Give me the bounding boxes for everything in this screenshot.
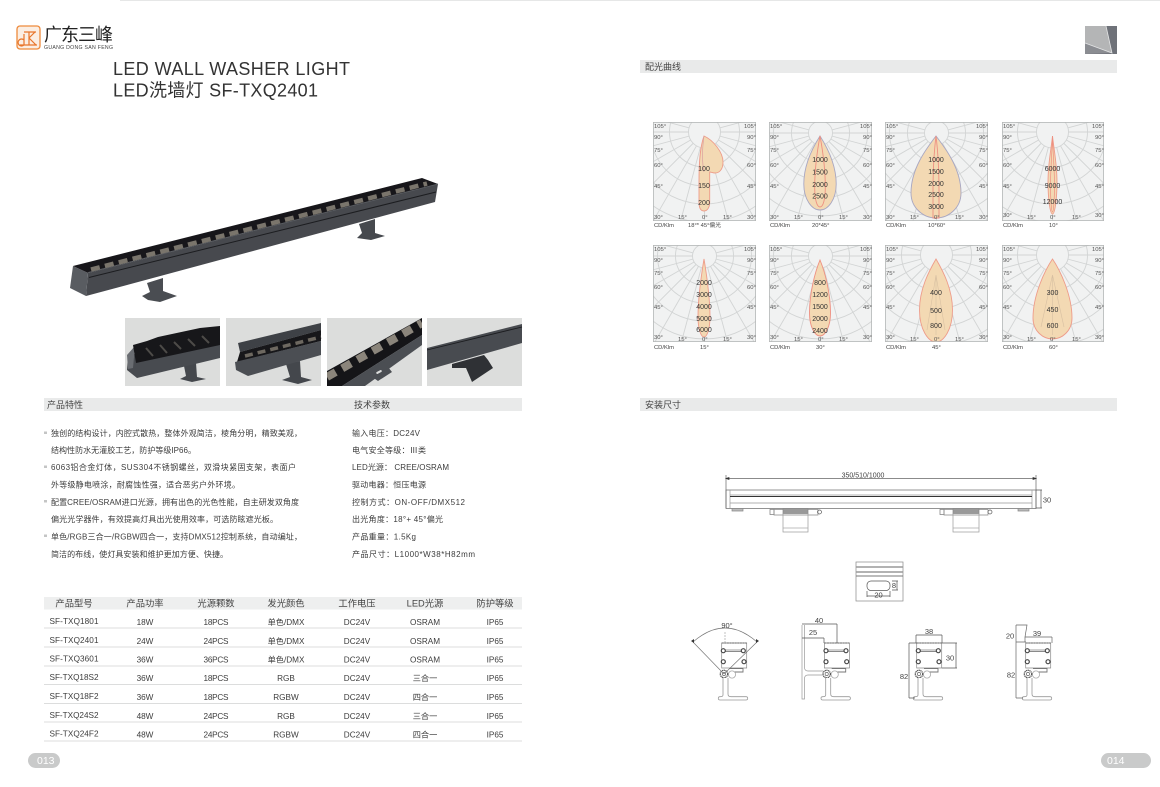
table rows: RGBW <box>273 693 299 702</box>
polar chart 15°: 60° <box>654 285 663 291</box>
polar chart 15°: 45° <box>747 305 756 311</box>
polar chart 18°*45°: 75° <box>747 148 756 154</box>
polar chart 10*60°: 45° <box>979 184 988 190</box>
polar chart 30°: 15° <box>794 337 803 343</box>
polar chart 60°: 45° <box>1095 305 1104 311</box>
table header: 工作电压 <box>338 598 376 608</box>
polar chart 60°: 15° <box>1072 337 1081 343</box>
polar chart 30°: 45° <box>770 305 779 311</box>
polar chart 45°: 45° <box>932 345 941 351</box>
side view: wall offset: 40 <box>815 616 823 625</box>
corner icon <box>1085 26 1117 54</box>
polar chart 20*45°: 0° <box>818 215 824 221</box>
logo: 广东三峰 <box>44 25 113 45</box>
polar chart 10°: 60° <box>1003 163 1012 169</box>
polar chart 10°: 15° <box>1027 215 1036 221</box>
polar chart 60°: 105° <box>1092 247 1104 253</box>
table header: 产品型号 <box>55 598 93 608</box>
side view: width and height: 38 <box>925 627 933 636</box>
polar chart 45°: 90° <box>979 258 988 264</box>
polar chart 10*60°: 2000 <box>928 181 944 188</box>
side view: top clearance <box>1006 625 1052 700</box>
technical parameters list: 产品尺寸：L1000*W38*H82mm <box>352 549 475 559</box>
polar chart 45°: 45° <box>979 305 988 311</box>
polar chart 15°: 90° <box>747 258 756 264</box>
table rows: SF-TXQ24F2 <box>50 730 99 738</box>
section header: light distribution curves <box>640 60 1117 73</box>
polar chart 30° <box>690 173 950 386</box>
side view: top clearance: 39 <box>1033 629 1041 638</box>
polar chart 45°: 105° <box>976 247 988 253</box>
polar chart 10*60°: 75° <box>886 148 895 154</box>
polar chart 10°: 90° <box>1003 135 1012 141</box>
polar chart 20*45°: 90° <box>863 135 872 141</box>
polar chart 18°*45°: 100 <box>698 166 710 173</box>
polar chart 20*45°: 1500 <box>812 170 828 176</box>
thumbnail: end detail with fins <box>125 318 220 386</box>
polar chart 10*60°: 15° <box>955 215 964 221</box>
polar chart 18°*45° <box>574 42 834 262</box>
side view: width and height <box>900 627 957 700</box>
polar chart 18°*45°: 75° <box>654 148 663 154</box>
front view drawing <box>726 475 1042 532</box>
title: LED WALL WASHER LIGHT <box>113 59 350 79</box>
polar chart 10*60°: 45° <box>886 184 895 190</box>
table rows: 单色/DMX <box>268 636 305 646</box>
table rows: 48W <box>137 730 154 740</box>
polar chart 60°: 300 <box>1047 290 1058 297</box>
polar chart 15°: 5000 <box>696 316 712 323</box>
section header: product features <box>44 398 522 411</box>
polar chart 10*60°: 30° <box>886 215 895 221</box>
table rows: DC24V <box>344 674 371 683</box>
polar chart 15°: 6000 <box>696 327 712 334</box>
side view: top clearance: 20 <box>1006 632 1014 640</box>
table rows: OSRAM <box>410 637 440 646</box>
polar chart 60°: 60° <box>1095 285 1104 291</box>
polar chart 45°: 500 <box>930 308 942 315</box>
polar chart 45°: 90° <box>886 258 895 264</box>
polar chart 18°*45°: 18°* 45°偏光 <box>688 221 721 229</box>
table rows: 36W <box>137 656 154 664</box>
table rows: DC24V <box>344 712 371 721</box>
polar chart 10*60°: 1500 <box>928 169 944 176</box>
polar chart 10*60°: 30° <box>979 215 988 221</box>
page number 013: 013 <box>37 755 55 767</box>
table rows: IP65 <box>487 656 504 664</box>
side view: wall offset: 25 <box>809 628 817 637</box>
polar chart 10*60° <box>806 50 1066 263</box>
polar chart 45°: 800 <box>930 323 942 330</box>
thumbnail: mounting bracket <box>427 318 522 386</box>
table rows: SF-TXQ18S2 <box>50 673 99 682</box>
polar chart 15°: 105° <box>654 247 666 253</box>
right mounting bracket <box>940 508 992 532</box>
polar chart 45°: 75° <box>979 271 988 277</box>
polar chart 20*45°: 20*45° <box>812 223 829 229</box>
table header <box>55 598 514 608</box>
table rows: OSRAM <box>410 618 440 627</box>
table rows: SF-TXQ3601 <box>50 654 99 664</box>
polar chart 10*60°: 0° <box>934 215 940 221</box>
product features list: 偏光光学器件，有效提高灯具出光使用效率，可选防眩遮光板。 <box>51 514 278 524</box>
front view dimension labels: 30 <box>1043 496 1051 504</box>
table header: LED光源 <box>407 598 443 608</box>
polar chart 30°: 1200 <box>812 292 828 299</box>
table rows: 36PCS <box>204 656 229 664</box>
polar chart 10°: 105° <box>1003 124 1015 130</box>
product features list: 6063铝合金灯体，SUS304不锈钢螺丝，双滑块紧固支架，表面户 <box>51 462 296 472</box>
polar chart 18°*45°: 60° <box>747 163 756 169</box>
polar chart 30°: CD/Klm <box>770 345 790 351</box>
polar chart 60°: 0° <box>1050 337 1056 343</box>
polar chart 10°: 0° <box>1050 215 1056 221</box>
polar chart 18°*45°: 15° <box>723 215 732 221</box>
section header: product features: 产品特性 <box>47 399 83 410</box>
table rows: 18PCS <box>204 674 229 683</box>
section header: product features: 技术参数 <box>354 399 390 410</box>
polar chart 60°: CD/Klm <box>1003 345 1023 351</box>
polar chart 18°*45°: 15° <box>678 215 687 221</box>
product features list <box>44 428 302 559</box>
polar chart 20*45°: 60° <box>770 163 779 169</box>
logo <box>17 25 113 51</box>
polar chart 45°: 15° <box>910 337 919 343</box>
title <box>113 59 350 100</box>
table rows: IP65 <box>487 712 504 721</box>
product features list: 简洁的布线，使灯具安装和维护更加方便、快捷。 <box>51 549 228 559</box>
polar chart 20*45°: 105° <box>860 124 872 130</box>
polar chart 10°: 9000 <box>1045 183 1060 190</box>
polar chart 60°: 105° <box>1003 247 1015 253</box>
polar chart 45°: 30° <box>886 335 895 341</box>
polar chart 18°*45°: 90° <box>747 135 756 141</box>
polar chart 15°: 3000 <box>696 292 712 299</box>
slot plate drawing: 8 <box>892 581 896 590</box>
table rows: DC24V <box>344 618 371 627</box>
front view dimension labels <box>842 472 1051 504</box>
polar chart 18°*45°: 60° <box>654 163 663 169</box>
polar chart 10*60°: 1000 <box>928 157 944 164</box>
polar chart 30°: 2000 <box>812 316 828 323</box>
table rows: IP65 <box>487 637 504 646</box>
polar chart 30°: 45° <box>863 305 872 311</box>
technical parameters list: 控制方式：ON-OFF/DMX512 <box>352 497 466 507</box>
polar chart 18°*45°: 45° <box>747 184 756 190</box>
table rows: 四合一 <box>413 692 437 702</box>
slot plate drawing: 20 <box>874 590 883 600</box>
polar chart 10*60°: 2500 <box>928 192 944 199</box>
polar chart 15°: 60° <box>747 285 756 291</box>
technical parameters list: 产品重量：1.5Kg <box>352 532 416 542</box>
polar chart 18°*45°: 200 <box>698 200 710 207</box>
polar chart 15°: 15° <box>723 337 732 343</box>
polar chart 10°: 30° <box>1095 213 1104 219</box>
polar chart 10°: 60° <box>1095 163 1104 169</box>
product features list: 外等级静电喷涂，耐腐蚀性强，适合恶劣户外环境。 <box>51 480 240 490</box>
polar chart 30°: 90° <box>770 258 779 264</box>
polar chart 15°: 105° <box>744 247 756 253</box>
table rows: 24PCS <box>204 712 229 721</box>
polar chart 30°: 2400 <box>812 328 828 335</box>
polar chart 10°: 90° <box>1095 135 1104 141</box>
logo: GUANG DONG SAN FENG <box>44 45 113 51</box>
polar chart 10*60°: 3000 <box>928 204 944 211</box>
polar chart 30°: 90° <box>863 258 872 264</box>
polar chart 20*45°: 105° <box>770 124 782 130</box>
polar chart 15°: 30° <box>747 335 756 341</box>
polar chart 20*45°: 30° <box>770 215 779 221</box>
table rows: 18PCS <box>204 618 229 627</box>
polar chart 45°: 0° <box>934 337 940 343</box>
polar chart 20*45°: 45° <box>863 184 872 190</box>
table rows: IP65 <box>487 618 504 627</box>
table rows: 24W <box>137 637 154 646</box>
polar chart 60° <box>922 165 1160 385</box>
polar chart 45°: 45° <box>886 305 895 311</box>
product photo: wall washer bar <box>70 178 438 302</box>
polar chart 20*45° <box>690 50 950 263</box>
polar chart 30°: 75° <box>770 271 779 277</box>
side view: top clearance: 82 <box>1007 670 1015 680</box>
polar chart 30°: 105° <box>860 247 872 253</box>
polar chart 60°: 30° <box>1003 335 1012 341</box>
polar chart 10*60°: 90° <box>979 135 988 141</box>
polar chart 45°: 60° <box>979 285 988 291</box>
table rows <box>50 617 504 740</box>
polar chart 15°: 45° <box>654 305 663 311</box>
table rows: 三合一 <box>413 673 437 683</box>
polar chart 30°: 15° <box>839 337 848 343</box>
technical parameters list: LED光源： CREE/OSRAM <box>352 462 449 472</box>
side view: width and height: 30 <box>946 654 954 662</box>
polar chart 30°: 105° <box>770 247 782 253</box>
table rows: IP65 <box>487 730 504 740</box>
polar chart 60°: 60° <box>1049 345 1058 351</box>
polar chart 10*60°: 60° <box>886 163 895 169</box>
polar chart 18°*45°: 30° <box>747 215 756 221</box>
polar chart 20*45°: 75° <box>770 148 779 154</box>
table rows: SF-TXQ24S2 <box>50 711 99 720</box>
polar chart 45°: 60° <box>886 285 895 291</box>
table header: 光源颗数 <box>197 598 235 608</box>
table rows: 18W <box>137 618 154 627</box>
polar chart 10°: 6000 <box>1045 166 1060 173</box>
polar chart 10°: 45° <box>1003 184 1012 190</box>
table rows: 36W <box>137 674 154 683</box>
product features list: 配置CREE/OSRAM进口光源，拥有出色的光色性能，自主研发双角度 <box>51 497 299 507</box>
polar chart 15°: 0° <box>702 337 708 343</box>
polar chart 30°: 1500 <box>812 304 828 311</box>
table rows: 四合一 <box>413 730 437 740</box>
polar chart 10°: 10° <box>1049 223 1058 229</box>
polar chart 10°: 75° <box>1095 148 1104 154</box>
product features list: 单色/RGB三合一/RGBW四合一，支持DMX512控制系统，自动编址， <box>51 532 302 542</box>
polar chart 30°: 60° <box>770 285 779 291</box>
polar chart 10*60°: 15° <box>910 215 919 221</box>
table rows: OSRAM <box>410 656 440 664</box>
polar chart 20*45°: 15° <box>839 215 848 221</box>
polar chart 20*45°: CD/Klm <box>770 223 790 229</box>
polar chart 20*45°: 1000 <box>812 157 828 164</box>
polar chart 20*45°: 2000 <box>812 182 828 189</box>
polar chart 20*45°: 45° <box>770 184 779 190</box>
side view: width and height: 82 <box>900 672 908 681</box>
polar chart 45°: 75° <box>886 271 895 277</box>
table rows: 24PCS <box>204 637 229 646</box>
polar chart 10°: 12000 <box>1043 199 1062 206</box>
polar chart 20*45°: 60° <box>863 163 872 169</box>
polar chart 18°*45°: CD/Klm <box>654 223 674 229</box>
polar chart 30°: 30° <box>863 335 872 341</box>
polar chart 10*60°: CD/Klm <box>886 223 906 229</box>
polar chart 20*45°: 15° <box>794 215 803 221</box>
polar chart 15°: 4000 <box>696 304 712 311</box>
table rows: IP65 <box>487 674 504 683</box>
thumbnail: front end view <box>226 318 321 386</box>
polar chart 15° <box>574 173 834 386</box>
table header: 产品功率 <box>126 598 164 608</box>
polar chart 10*60°: 105° <box>886 124 898 130</box>
title: LED洗墙灯 SF-TXQ2401 <box>113 80 318 100</box>
polar chart 15°: 90° <box>654 258 663 264</box>
technical parameters list <box>352 428 475 559</box>
polar chart 10*60°: 75° <box>979 148 988 154</box>
polar chart 60°: 450 <box>1047 307 1058 314</box>
polar chart 15°: 15° <box>700 345 709 351</box>
polar chart 10° <box>922 42 1160 262</box>
section header: light distribution curves: 配光曲线 <box>645 61 681 72</box>
page number 014 <box>1101 753 1151 768</box>
polar chart 10°: 30° <box>1003 213 1012 219</box>
polar chart 10°: CD/Klm <box>1003 223 1023 229</box>
table rows: 48W <box>137 712 154 721</box>
polar chart 60°: 30° <box>1095 335 1104 341</box>
table rows: DC24V <box>344 637 371 646</box>
polar chart 15°: 2000 <box>696 280 712 287</box>
technical parameters list: 驱动电器：恒压电源 <box>352 480 426 490</box>
table rows: 单色/DMX <box>268 617 305 627</box>
thumbnail: LED close-up <box>327 318 422 386</box>
table rows: IP65 <box>487 693 504 702</box>
polar chart 20*45°: 2500 <box>812 194 828 200</box>
table rows: RGBW <box>273 730 299 740</box>
polar chart 60°: 90° <box>1095 258 1104 264</box>
product features list: 独创的结构设计，内腔式散热，整体外观简洁，棱角分明，精致美观， <box>51 428 302 438</box>
technical parameters list: 输入电压：DC24V <box>352 428 421 438</box>
page number 014: 014 <box>1107 755 1125 767</box>
table rows: SF-TXQ1801 <box>50 617 99 626</box>
polar chart 60°: 45° <box>1003 305 1012 311</box>
polar chart 15°: 75° <box>654 271 663 277</box>
logo mark <box>17 26 40 49</box>
table rows: RGB <box>277 674 295 683</box>
table rows: 三合一 <box>413 711 437 721</box>
section header: installation dimensions <box>640 398 1117 411</box>
polar chart 18°*45°: 150 <box>698 183 710 190</box>
polar chart 45°: CD/Klm <box>886 345 906 351</box>
polar chart 45° <box>806 165 1066 385</box>
front view dimension labels: 350/510/1000 <box>842 472 885 480</box>
polar chart 15°: 75° <box>747 271 756 277</box>
polar chart 30°: 75° <box>863 271 872 277</box>
section header: installation dimensions: 安装尺寸 <box>645 399 681 410</box>
polar chart 20*45°: 90° <box>770 135 779 141</box>
polar chart 60°: 60° <box>1003 285 1012 291</box>
table rows: DC24V <box>344 730 371 740</box>
polar chart 18°*45°: 45° <box>654 184 663 190</box>
polar chart 10*60°: 90° <box>886 135 895 141</box>
polar chart 10*60°: 105° <box>976 124 988 130</box>
polar chart 10*60°: 60° <box>979 163 988 169</box>
polar chart 18°*45°: 105° <box>744 124 756 130</box>
polar chart 15°: 15° <box>678 337 687 343</box>
polar chart 60°: 75° <box>1003 271 1012 277</box>
polar chart 20*45°: 75° <box>863 148 872 154</box>
polar chart 45°: 105° <box>886 247 898 253</box>
page number 013 <box>28 753 60 768</box>
table rows: DC24V <box>344 656 371 664</box>
polar chart 60°: 15° <box>1027 337 1036 343</box>
polar chart 45°: 400 <box>930 290 942 297</box>
polar chart 60°: 600 <box>1047 323 1058 330</box>
polar chart 45°: 30° <box>979 335 988 341</box>
polar chart 20*45°: 30° <box>863 215 872 221</box>
polar chart 30°: 800 <box>814 280 826 287</box>
polar chart 18°*45°: 105° <box>654 124 666 130</box>
side view: 90° rotation: 90° <box>721 621 733 630</box>
polar chart 30°: 0° <box>818 337 824 343</box>
left mounting bracket <box>770 508 822 532</box>
polar chart 15°: 30° <box>654 335 663 341</box>
polar chart 30°: 30° <box>816 345 825 351</box>
polar chart 60°: 75° <box>1095 271 1104 277</box>
table rows: 单色/DMX <box>268 654 305 664</box>
polar chart 45°: 15° <box>955 337 964 343</box>
polar chart 60°: 90° <box>1003 258 1012 264</box>
table rows: 36W <box>137 693 154 702</box>
product table <box>44 597 522 741</box>
table rows: SF-TXQ18F2 <box>50 692 99 701</box>
product features list: 结构性防水无灌胶工艺，防护等级IP66。 <box>51 445 196 455</box>
polar chart 15°: CD/Klm <box>654 345 674 351</box>
table header: 发光颜色 <box>267 598 305 608</box>
polar chart 30°: 60° <box>863 285 872 291</box>
polar chart 30°: 30° <box>770 335 779 341</box>
table rows: 18PCS <box>204 693 229 702</box>
top edge line <box>120 0 1160 1</box>
polar chart 10*60°: 10*60° <box>928 223 945 229</box>
polar chart 18°*45°: 90° <box>654 135 663 141</box>
polar chart 10°: 45° <box>1095 184 1104 190</box>
table rows: RGB <box>277 712 295 721</box>
side view: wall offset <box>802 616 850 700</box>
polar chart 18°*45°: 30° <box>654 215 663 221</box>
polar chart 18°*45°: 0° <box>702 215 708 221</box>
polar chart 10°: 75° <box>1003 148 1012 154</box>
technical parameters list: 电气安全等级：Ⅲ类 <box>352 445 426 455</box>
table rows: 24PCS <box>204 730 229 740</box>
table rows: DC24V <box>344 693 371 702</box>
table rows: SF-TXQ2401 <box>50 636 99 645</box>
polar chart 10°: 15° <box>1072 215 1081 221</box>
technical parameters list: 出光角度：18°+ 45°偏光 <box>352 514 443 524</box>
side view: 90° rotation <box>691 621 759 700</box>
polar chart 10°: 105° <box>1092 124 1104 130</box>
slot plate drawing <box>856 562 903 601</box>
table header: 防护等级 <box>476 598 514 608</box>
